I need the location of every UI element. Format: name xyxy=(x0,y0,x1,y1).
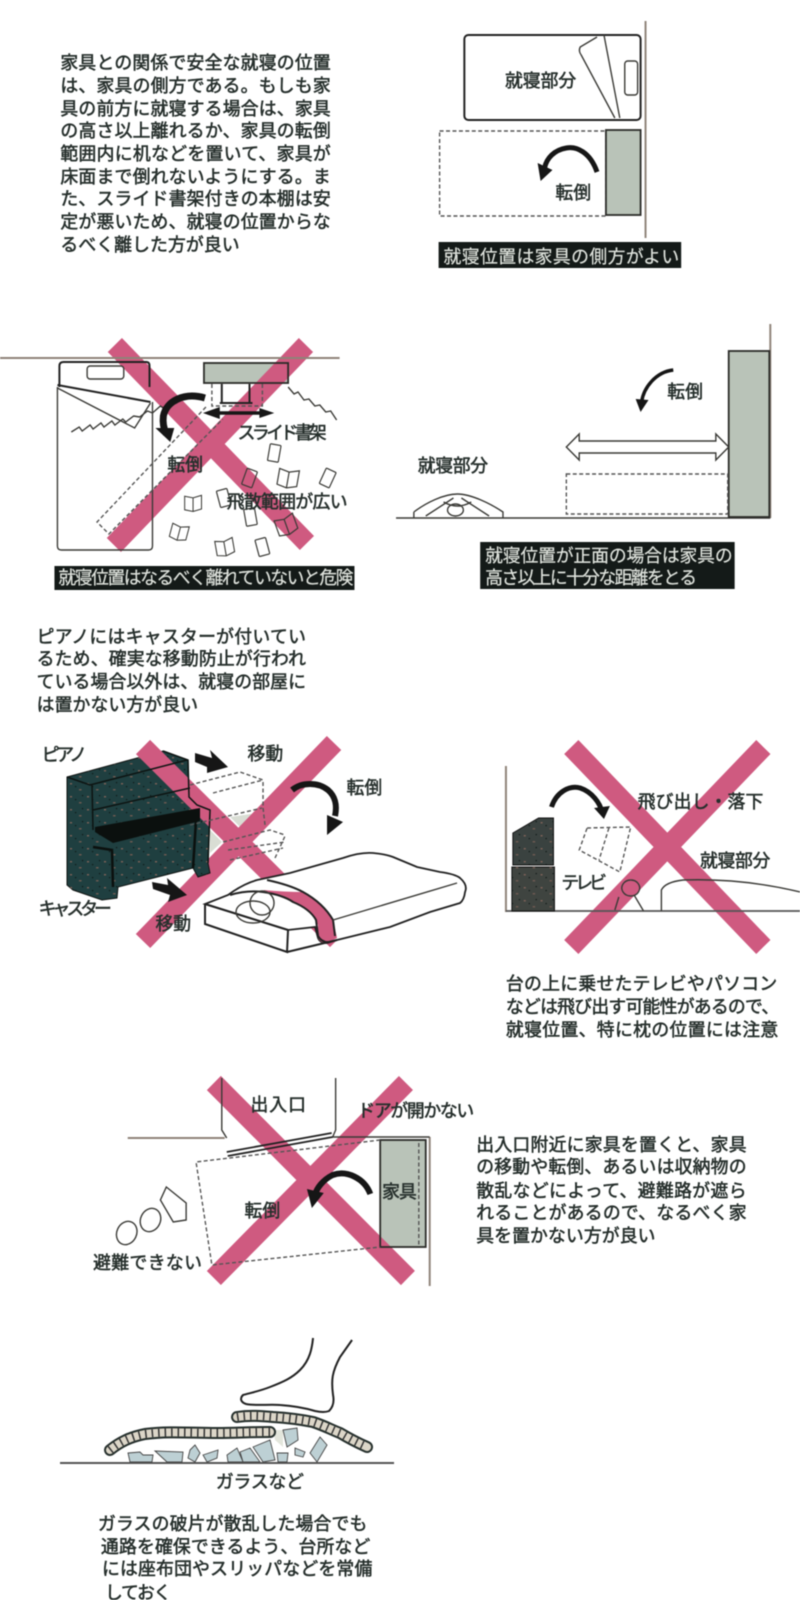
text block: piano: ている場合以外は、就寝の部屋に xyxy=(37,672,306,692)
diagram: foot and broken glass xyxy=(60,1338,394,1492)
diagram: sliding bookcase xyxy=(0,345,348,557)
caption bar: frontal position distance xyxy=(480,542,735,589)
bookcase fill xyxy=(204,363,288,383)
text block: piano xyxy=(37,627,306,715)
dashed television xyxy=(579,827,631,872)
label: caster: キャスター xyxy=(39,899,112,919)
arrow: slide xyxy=(203,407,274,419)
arrow: topple xyxy=(155,396,205,442)
text block: television: 台の上に乗せたテレビやパソコン xyxy=(506,974,777,994)
diagram: frontal position side view xyxy=(396,324,770,518)
label: piano: ピアノ xyxy=(42,745,87,765)
diagram: bed beside furniture xyxy=(440,21,646,238)
label: television: テレビ xyxy=(561,873,607,893)
door xyxy=(227,1133,333,1156)
label: move: 移動 xyxy=(155,914,191,934)
label: sleeping area: 就寝部分 xyxy=(505,71,576,91)
text block: safe sleeping position xyxy=(60,53,331,255)
text block: safe sleeping position: 床面まで倒れないようにする。ま xyxy=(60,167,331,187)
foot xyxy=(241,1338,352,1412)
label: flying and falling: 飛び出し・落下 xyxy=(638,792,763,812)
text block: safe sleeping position: の高さ以上離れるか、家具の転倒 xyxy=(60,121,331,141)
arrow: flying xyxy=(551,787,610,819)
text block: doorway: 散乱などによって、避難路が遮ら xyxy=(476,1181,747,1201)
text block: doorway: 出入口附近に家具を置くと、家具 xyxy=(476,1135,747,1155)
text block: safe sleeping position: は、家具の側方である。もしも家 xyxy=(60,76,331,96)
futon xyxy=(414,494,503,518)
red cross arm over piano xyxy=(143,747,337,940)
text block: safe sleeping position: るべく離した方が良い xyxy=(60,235,240,255)
text block: doorway: れることがあるので、なるべく家 xyxy=(476,1203,747,1223)
gray floor patches xyxy=(210,813,257,853)
slipper xyxy=(237,1416,367,1447)
bed xyxy=(464,35,641,120)
broken glass xyxy=(128,1428,327,1462)
label: topple: 転倒 xyxy=(347,778,382,798)
red cross arm behind piano xyxy=(143,743,334,941)
text block: safe sleeping position: 定が悪いため、就寝の位置からな xyxy=(60,212,331,232)
diagram: blocked doorway xyxy=(93,1078,474,1286)
text block: doorway: の移動や転倒、あるいは収納物の xyxy=(476,1157,747,1177)
evacuees xyxy=(113,1187,186,1248)
bookcase xyxy=(204,363,288,406)
futon body xyxy=(205,853,466,943)
text block: piano: るため、確実な移動防止が行われ xyxy=(37,649,306,669)
text block: glass: ガラスの破片が散乱した場合でも xyxy=(98,1514,367,1534)
cushion xyxy=(110,1432,270,1450)
text block: glass xyxy=(98,1514,372,1600)
arrow: topple xyxy=(538,148,597,181)
arrow: topple xyxy=(292,784,343,835)
label: topple: 転倒 xyxy=(555,183,591,203)
text block: television: などは飛び出す可能性があるので、 xyxy=(506,997,779,1017)
label: sleeping area: 就寝部分 xyxy=(418,456,488,476)
text block: piano: ピアノにはキャスターが付いてい xyxy=(37,627,306,647)
text block: doorway: 具を置かない方が良い xyxy=(476,1226,655,1246)
caption bar: frontal position distance: 就寝位置が正面の場合は家具の xyxy=(485,546,733,566)
blanket band xyxy=(263,890,337,943)
dashed fall range xyxy=(196,1140,380,1265)
dashed fall range xyxy=(566,474,728,514)
text block: piano: は置かない方が良い xyxy=(37,695,198,715)
text block: safe sleeping position: 家具との関係で安全な就寝の位置 xyxy=(60,53,331,73)
label: furniture: 家具 xyxy=(382,1182,417,1202)
label: topple: 転倒 xyxy=(167,455,203,475)
label: move: 移動 xyxy=(248,744,283,764)
diagram: television xyxy=(506,747,800,947)
piano body xyxy=(67,751,210,900)
scattered books xyxy=(169,444,336,557)
text block: safe sleeping position: 具の前方に就寝する場合は、家具 xyxy=(60,99,331,119)
text block: glass: 通路を確保できるよう、台所など xyxy=(101,1537,370,1557)
arrow: move upper xyxy=(195,750,228,773)
label: cannot evacuate: 避難できない xyxy=(93,1253,202,1273)
label: topple: 転倒 xyxy=(667,382,703,402)
label: doorway: 出入口 xyxy=(250,1095,306,1115)
text block: television: 就寝位置、特に枕の位置には注意 xyxy=(506,1020,778,1040)
bed xyxy=(57,362,152,550)
label: topple: 転倒 xyxy=(245,1201,280,1221)
futon line art xyxy=(205,880,457,952)
arrow: topple xyxy=(636,370,673,412)
arrow: distance xyxy=(566,434,729,460)
text block: television xyxy=(506,974,779,1040)
piano line art xyxy=(67,751,210,887)
furniture xyxy=(606,130,641,215)
caption bar: side position: 就寝位置は家具の側方がよい xyxy=(444,247,679,267)
person xyxy=(615,880,800,911)
furniture xyxy=(729,351,769,517)
furniture outline xyxy=(380,1140,426,1247)
television xyxy=(513,818,553,865)
text block: safe sleeping position: 範囲内に机などを置いて、家具が xyxy=(60,144,331,164)
furniture fill xyxy=(380,1140,426,1247)
arrow: topple xyxy=(307,1174,370,1208)
red cross xyxy=(114,345,307,545)
label: sliding bookcase: スライド書架 xyxy=(238,423,327,443)
stand xyxy=(512,867,554,911)
dashed fall range xyxy=(440,131,606,216)
red cross xyxy=(214,1083,408,1278)
label: door will not open: ドアが開かない xyxy=(357,1101,474,1121)
label: wide scatter range: 飛散範囲が広い xyxy=(227,492,348,512)
caption bar: keep distance: 就寝位置はなるべく離れていないと危険 xyxy=(58,568,354,588)
label: glass etc: ガラスなど xyxy=(216,1472,304,1492)
caption bar: frontal position distance: 高さ以上に十分な距離をとる xyxy=(485,568,697,588)
arrow: move lower xyxy=(152,878,187,902)
diagram: piano xyxy=(39,743,466,952)
dashed piano xyxy=(190,772,285,860)
text block: doorway xyxy=(476,1135,747,1246)
text block: safe sleeping position: た、スライド書架付きの本棚は安 xyxy=(60,189,331,209)
label: sleeping area: 就寝部分 xyxy=(700,851,770,871)
red cross xyxy=(571,747,763,947)
text block: glass: には座布団やスリッパなどを常備 xyxy=(102,1559,372,1579)
